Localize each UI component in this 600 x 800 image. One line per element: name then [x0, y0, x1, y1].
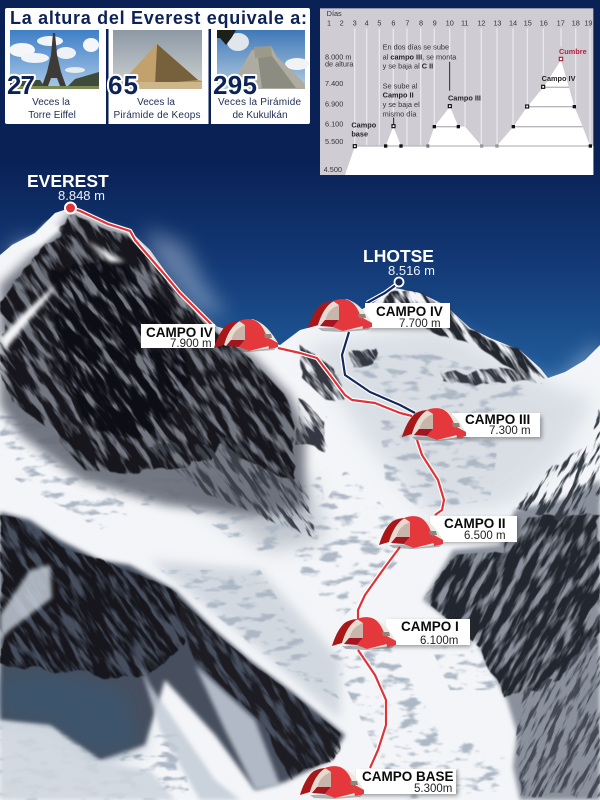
bottom left snow [0, 722, 175, 800]
annotation: campo III: C II [422, 62, 433, 71]
chart background [320, 8, 593, 175]
altitude labels: 8.000 m [325, 52, 351, 61]
annotation: campo II: Campo II [383, 91, 414, 100]
Everest label [27, 171, 109, 214]
Everest core shadow [55, 258, 195, 440]
number 295: 295 [213, 70, 257, 100]
Everest label: 8.848 m [58, 188, 105, 203]
header band background [0, 0, 600, 130]
camp: Lhotse IV: CAMPO IV [376, 304, 443, 319]
summit marker [559, 57, 563, 61]
camp: I: 6.100m [420, 635, 458, 647]
caption: Veces la [137, 97, 175, 108]
camp: II: 6.500 m [464, 530, 506, 542]
haze [0, 228, 600, 395]
altitude profile chart [320, 8, 593, 175]
annotation: campo II: y se baja el [383, 100, 420, 109]
camp: III: CAMPO III [465, 412, 530, 427]
day labels: 9 [433, 18, 437, 27]
caption: de Kukulkán [232, 110, 288, 121]
annotation: campo III: campo III, se monta [390, 52, 456, 61]
camp: I: CAMPO I [401, 619, 459, 634]
day labels: 18 [572, 18, 580, 27]
camp: II: CAMPO II [444, 516, 506, 531]
Everest snow cap and gullies [0, 222, 125, 350]
day labels: 15 [524, 18, 532, 27]
right rock upper and lower streaks [515, 410, 600, 795]
right rock dark streaks [425, 515, 600, 700]
camp: II [379, 516, 519, 549]
caption: Torre Eiffel [28, 110, 76, 121]
day labels: 14 [509, 18, 517, 27]
card: Torre Eiffel [7, 30, 99, 121]
snow base [0, 208, 600, 800]
camp: Everest IV [141, 319, 278, 352]
day labels: 1 [327, 18, 331, 27]
camp labels: Cumbre [559, 47, 587, 56]
camp: base: CAMPO BASE [362, 769, 454, 784]
day labels: 7 [405, 18, 409, 27]
icefall texture [0, 350, 540, 800]
camp: III [402, 408, 542, 441]
day labels: 2 [340, 18, 344, 27]
day labels: Días [327, 9, 342, 18]
photo: Eiffel tower [9, 30, 99, 89]
caption: Veces la Pirámide [218, 97, 301, 108]
lower left blue shade [0, 675, 140, 758]
day labels: 8 [419, 18, 423, 27]
route: Lhotse ascent [342, 285, 415, 413]
profile area [345, 60, 593, 175]
altitude labels: 4.500 [324, 165, 342, 174]
card: Kukulkan [213, 30, 309, 121]
photo: mountain panorama [0, 208, 600, 800]
camp: base: 5.300m [414, 783, 452, 795]
right rock midtone [423, 480, 600, 800]
lower left rock midtone [0, 512, 345, 790]
camp: Lhotse IV [308, 299, 452, 332]
camp: base [300, 766, 458, 799]
altitude labels: de altura [325, 60, 354, 69]
markers [384, 105, 592, 148]
photo: pyramid [113, 30, 202, 89]
number 65: 65 [108, 70, 138, 100]
day labels: 4 [365, 18, 369, 27]
summit marker [394, 278, 404, 286]
camp: Everest IV: 7.900 m [170, 338, 212, 350]
day labels: 13 [493, 18, 501, 27]
altitude labels: 7.400 [325, 79, 343, 88]
card: Keops [108, 30, 202, 121]
day labels: 16 [540, 18, 548, 27]
camp: III: 7.300 m [489, 425, 531, 437]
route: Everest ascent [70, 208, 444, 768]
annotation: campo III: En dos días se sube [383, 43, 449, 52]
level lines [355, 87, 590, 146]
lower left snow streaks [0, 565, 280, 800]
annotation: campo II: Se sube al [383, 82, 418, 91]
title: La altura del Everest equivale a: [10, 8, 307, 28]
altitude labels: 6.100 [325, 120, 343, 129]
number 27: 27 [7, 70, 35, 100]
Lhotse rock [300, 290, 546, 450]
caption: Veces la [32, 97, 70, 108]
camp labels: Campo IV [542, 74, 576, 83]
summit marker [65, 202, 76, 214]
camp labels: Campo [351, 120, 377, 129]
camp labels: base [351, 129, 368, 138]
snow shading [305, 325, 595, 515]
Everest label: EVEREST [27, 171, 109, 191]
Lhotse label [363, 246, 435, 286]
annotation: campo II: mismo día [383, 109, 417, 118]
altitude labels: 6.900 [325, 100, 343, 109]
annotation: campo III: al [383, 52, 390, 61]
Everest streaked lower slope [150, 440, 320, 540]
day labels: 17 [557, 18, 565, 27]
camp: Lhotse IV: 7.700 m [399, 318, 441, 330]
day labels: 5 [377, 18, 381, 27]
day grid lines [355, 28, 590, 146]
day labels: 11 [461, 18, 469, 27]
Lhotse label: LHOTSE [363, 246, 434, 266]
photo: Kukulkan pyramid [217, 30, 309, 89]
day labels: 19 [584, 18, 592, 27]
lower left dark rock [0, 515, 342, 778]
title panel [5, 8, 310, 125]
Lhotse label: 8.516 m [388, 263, 435, 278]
day labels: 12 [477, 18, 485, 27]
caption: Pirámide de Keops [114, 110, 200, 121]
Everest dark face [0, 214, 298, 480]
annotation: campo III: y se baja al [383, 62, 422, 71]
camp labels: Campo III [448, 93, 481, 102]
camp: I [332, 617, 471, 650]
altitude labels: 5.500 [325, 137, 343, 146]
day labels: 3 [353, 18, 357, 27]
day labels: 6 [391, 18, 395, 27]
Everest midtone face [0, 212, 305, 515]
day labels: 10 [446, 18, 454, 27]
camp: Everest IV: CAMPO IV [146, 325, 213, 340]
